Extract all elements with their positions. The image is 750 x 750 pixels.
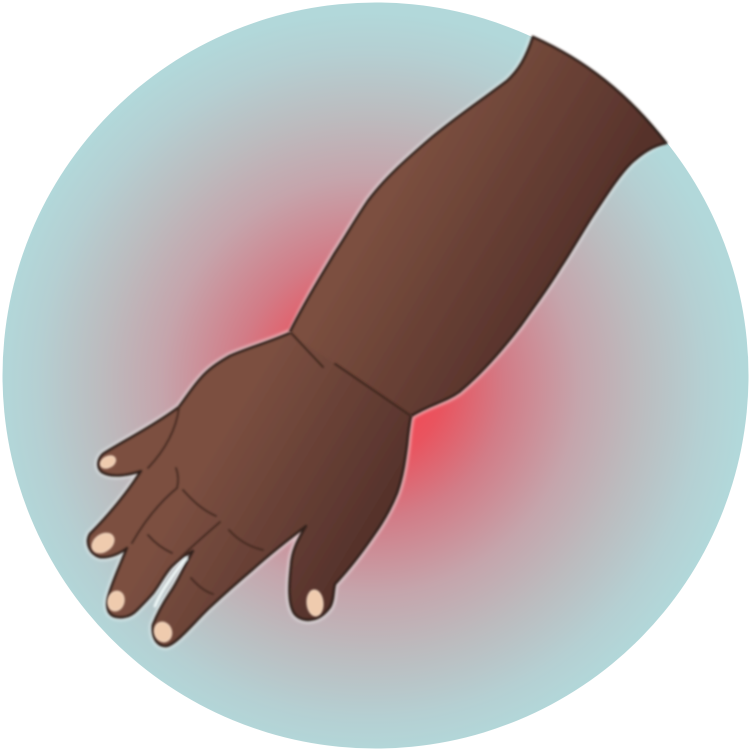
nail: index finger bbox=[152, 620, 174, 644]
nail: middle finger bbox=[106, 589, 126, 613]
hand bbox=[88, 333, 411, 646]
fingernails bbox=[88, 453, 324, 644]
finger crease lines bbox=[132, 408, 263, 594]
nail: ring finger bbox=[88, 529, 118, 557]
arm fill bbox=[290, 37, 666, 425]
palm fill bbox=[88, 333, 411, 646]
nail: thumb bbox=[306, 589, 324, 617]
gap between middle fingers bbox=[155, 559, 186, 606]
nail: little finger bbox=[98, 453, 118, 471]
light halo around limb bbox=[88, 37, 665, 646]
arm bbox=[290, 37, 666, 425]
hand outline bbox=[88, 333, 411, 646]
arm outline bbox=[290, 37, 666, 416]
wrist crease lines bbox=[291, 333, 411, 416]
